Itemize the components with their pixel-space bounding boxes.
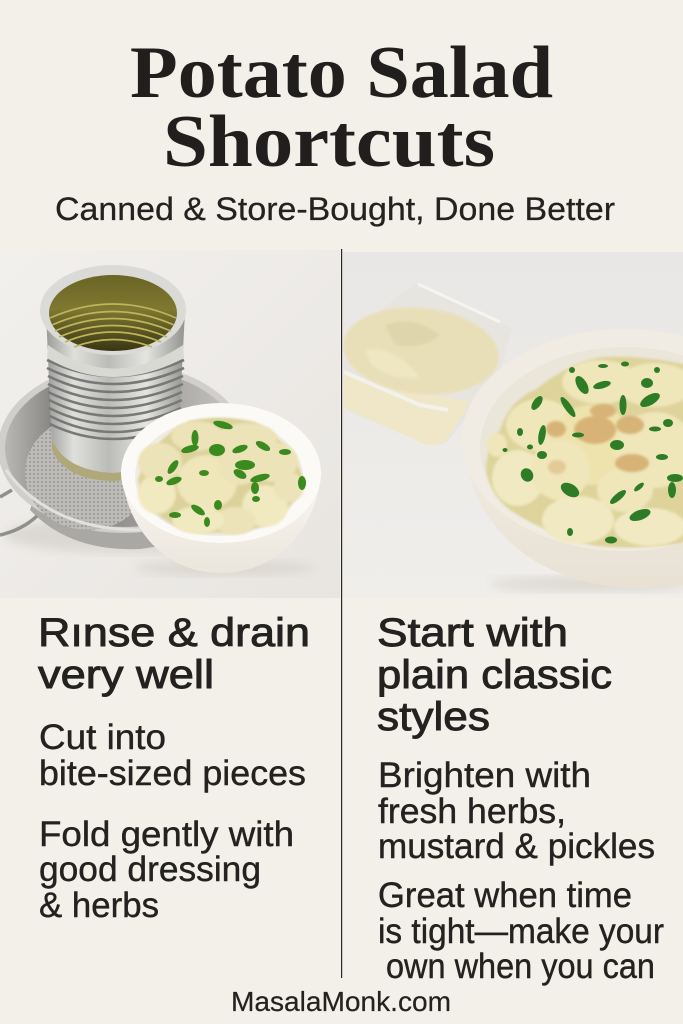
left heading: Rınse & drain: [38, 611, 310, 655]
right tip: brighten: [378, 756, 655, 866]
photo: store-bought potato salad in tub and bowl: [339, 252, 683, 598]
white bowl of potato salad: [121, 403, 321, 576]
center divider line: [341, 249, 342, 978]
photo: canned potato salad with can and strainer: [0, 250, 340, 598]
right tip: time: [378, 876, 664, 986]
title: [130, 32, 553, 183]
open tin can: [40, 265, 186, 481]
strainer: [0, 373, 230, 554]
right heading: plain classic: [377, 653, 612, 697]
potato pieces: [138, 421, 304, 535]
right heading: Start with: [377, 611, 568, 655]
left tip: cut: bite-sized pieces: [39, 754, 306, 793]
cream bowl of potato salad: [462, 329, 683, 592]
left tip: cut: Cut into: [39, 718, 166, 757]
title: Potato Salad: [130, 32, 553, 114]
left heading: very well: [38, 653, 214, 697]
right tip: brighten: Brighten with: [378, 756, 591, 795]
subtitle: Canned & Store-Bought, Done Better: [55, 191, 615, 227]
footer website: MasalaMonk.com: [231, 986, 451, 1017]
parsley: [502, 362, 683, 544]
left tip: fold: good dressing: [39, 850, 261, 889]
left tip: fold: Fold gently with: [39, 815, 294, 854]
right tip: time: own when you can: [386, 947, 655, 986]
left tip: cut: [39, 718, 306, 793]
paprika: [546, 404, 649, 474]
right tip: time: Great when time: [378, 876, 632, 915]
right tip: brighten: mustard & pickles: [378, 827, 655, 866]
right tip: time: is tight—make your: [378, 912, 664, 951]
right heading: styles: [377, 695, 490, 739]
plastic tub of store-bought salad: [339, 283, 512, 445]
left heading: [38, 611, 310, 697]
right heading: [377, 611, 612, 739]
right tip: brighten: fresh herbs,: [378, 792, 566, 831]
left tip: fold: [39, 815, 294, 925]
potato pieces: [487, 360, 683, 546]
title: Shortcuts: [163, 101, 495, 183]
parsley: [155, 419, 306, 527]
left tip: fold: & herbs: [39, 886, 159, 925]
